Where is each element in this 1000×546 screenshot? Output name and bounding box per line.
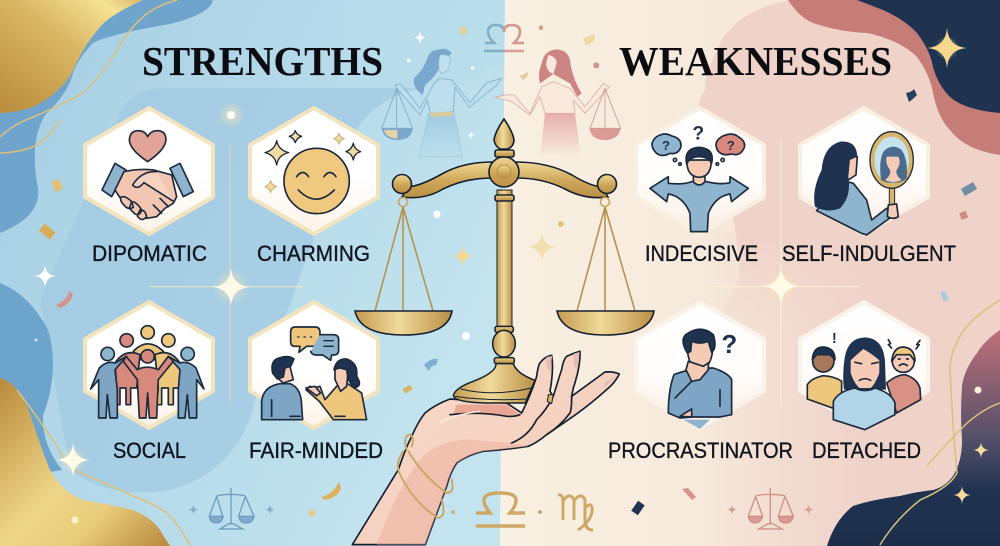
scale pan left	[355, 311, 452, 335]
label: self-indulgent: SELF-INDULGENT	[782, 241, 956, 266]
hexagon: dipomatic	[85, 108, 213, 234]
icon: handshake with heart	[102, 131, 193, 219]
scale pan right	[557, 311, 654, 335]
icon: small scale rose	[727, 488, 814, 529]
icon: smiley with sparkles	[265, 131, 361, 214]
icon: thinking man	[668, 329, 737, 429]
icon: libra symbol top	[484, 25, 524, 51]
hexagon: self-indulgent	[800, 108, 928, 234]
scale column	[494, 119, 514, 328]
hexagon: fair-minded	[250, 302, 378, 428]
icon: virgo symbol bottom	[451, 495, 593, 530]
icon: two people in conversation	[262, 327, 367, 420]
label: indecisive: INDECISIVE	[645, 241, 758, 266]
label: detached: DETACHED	[812, 438, 921, 463]
icon: person at crossroads	[650, 123, 748, 232]
title: strengths: STRENGTHS	[142, 38, 383, 84]
background: weaknesses side	[500, 0, 1000, 546]
background: strengths side	[0, 0, 505, 546]
icon: person at crossroads: ?	[662, 138, 670, 153]
label: fair-minded: FAIR-MINDED	[249, 438, 383, 463]
figure: rose goddess with scale	[495, 25, 621, 157]
blob: gold bottom left	[0, 378, 170, 546]
fingernails	[546, 352, 619, 388]
icon: person at crossroads: ?	[692, 123, 704, 144]
icon: sad woman between two people: !	[832, 331, 837, 347]
scale beam	[392, 157, 616, 206]
hexagon: charming	[250, 108, 378, 234]
blob: navy bottom right	[827, 330, 1000, 546]
hexagon: indecisive	[636, 108, 764, 234]
icon: libra symbol bottom	[476, 493, 525, 526]
label: social: SOCIAL	[113, 438, 186, 463]
figure: blue goddess with scale	[382, 27, 502, 266]
blob: navy top right	[857, 0, 1000, 113]
icon: bracelets	[398, 435, 453, 518]
divider: strengths	[150, 145, 305, 405]
scale base	[453, 326, 553, 404]
icon: person at crossroads: ?	[727, 138, 735, 153]
icon: thinking man: ?	[721, 329, 737, 359]
icon: woman and mirror	[814, 132, 913, 235]
illustration: golden balance scale	[355, 119, 654, 404]
icon: small scale blue	[188, 488, 275, 529]
title: weaknesses: WEAKNESSES	[619, 38, 892, 84]
icon: group of people	[91, 326, 204, 418]
blob: gold top left	[0, 0, 143, 113]
divider: weaknesses	[705, 140, 860, 405]
label: dipomatic: DIPOMATIC	[92, 241, 207, 266]
label: procrastinator: PROCRASTINATOR	[608, 438, 793, 463]
hexagon: procrastinator	[636, 302, 764, 428]
illustration: hand holding the scale	[352, 351, 619, 545]
icon: sad woman between two people	[807, 331, 921, 430]
hexagon: social	[85, 302, 213, 428]
blob: rose top right	[788, 0, 1000, 155]
scale strings	[375, 207, 635, 311]
label: charming: CHARMING	[257, 241, 370, 266]
hexagon: detached	[800, 302, 928, 428]
